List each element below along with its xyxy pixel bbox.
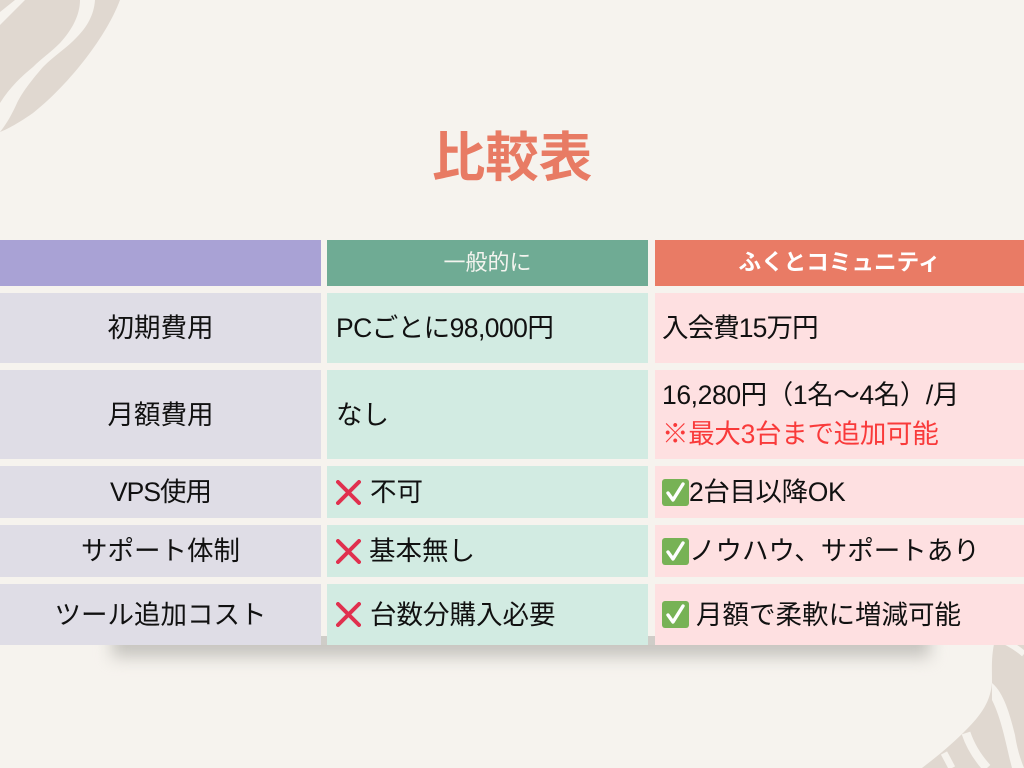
row 3 general: 不可 bbox=[370, 477, 423, 507]
row 3 label: VPS使用 bbox=[110, 477, 211, 507]
row 2 label bbox=[0, 370, 321, 459]
row 1 label bbox=[0, 293, 321, 363]
row 4 label: サポート体制 bbox=[81, 536, 240, 566]
row 1 general: PCごとに98,000円 bbox=[336, 313, 553, 343]
decoration: top-left leaf bbox=[0, 0, 120, 132]
header: general: 一般的に bbox=[443, 250, 532, 275]
shadow band behind table gaps bbox=[321, 636, 655, 645]
row 2 label: 月額費用 bbox=[108, 400, 214, 430]
row 5 community: 月額で柔軟に増減可能 bbox=[696, 600, 961, 630]
row 4 general: 基本無し bbox=[369, 536, 475, 566]
row 4 community: ノウハウ、サポートあり bbox=[689, 536, 980, 566]
row 5 label: ツール追加コスト bbox=[54, 600, 266, 630]
header: empty bbox=[0, 240, 321, 286]
row 2 community: 16,280円（1名～4名）/月 bbox=[662, 380, 959, 410]
title: 比較表 bbox=[432, 129, 592, 188]
header: community: ふくとコミュニティ bbox=[738, 250, 940, 275]
row 5 community bbox=[655, 584, 1024, 645]
row 2 general: なし bbox=[336, 400, 389, 430]
header: general bbox=[327, 240, 648, 286]
decoration: bottom-right leaf bbox=[922, 645, 1024, 768]
row 3 label bbox=[0, 466, 321, 518]
row 2 community: ※最大3台まで追加可能 bbox=[662, 419, 938, 449]
row 5 general bbox=[327, 584, 648, 645]
header: community bbox=[655, 240, 1024, 286]
row 3 general bbox=[327, 466, 648, 518]
row 4 community bbox=[655, 525, 1024, 577]
row 1 general bbox=[327, 293, 648, 363]
row 4 general bbox=[327, 525, 648, 577]
row 3 community bbox=[655, 466, 1024, 518]
row 3 community: 2台目以降OK bbox=[689, 477, 845, 507]
row 1 community bbox=[655, 293, 1024, 363]
comparison table bbox=[0, 240, 1024, 645]
row 1 label: 初期費用 bbox=[108, 313, 214, 343]
row 2 community bbox=[655, 370, 1024, 459]
row 5 label bbox=[0, 584, 321, 645]
row 4 label bbox=[0, 525, 321, 577]
row 1 community: 入会費15万円 bbox=[662, 313, 818, 343]
table shadow bbox=[104, 645, 938, 665]
row 5 general: 台数分購入必要 bbox=[370, 600, 556, 630]
row 2 general bbox=[327, 370, 648, 459]
